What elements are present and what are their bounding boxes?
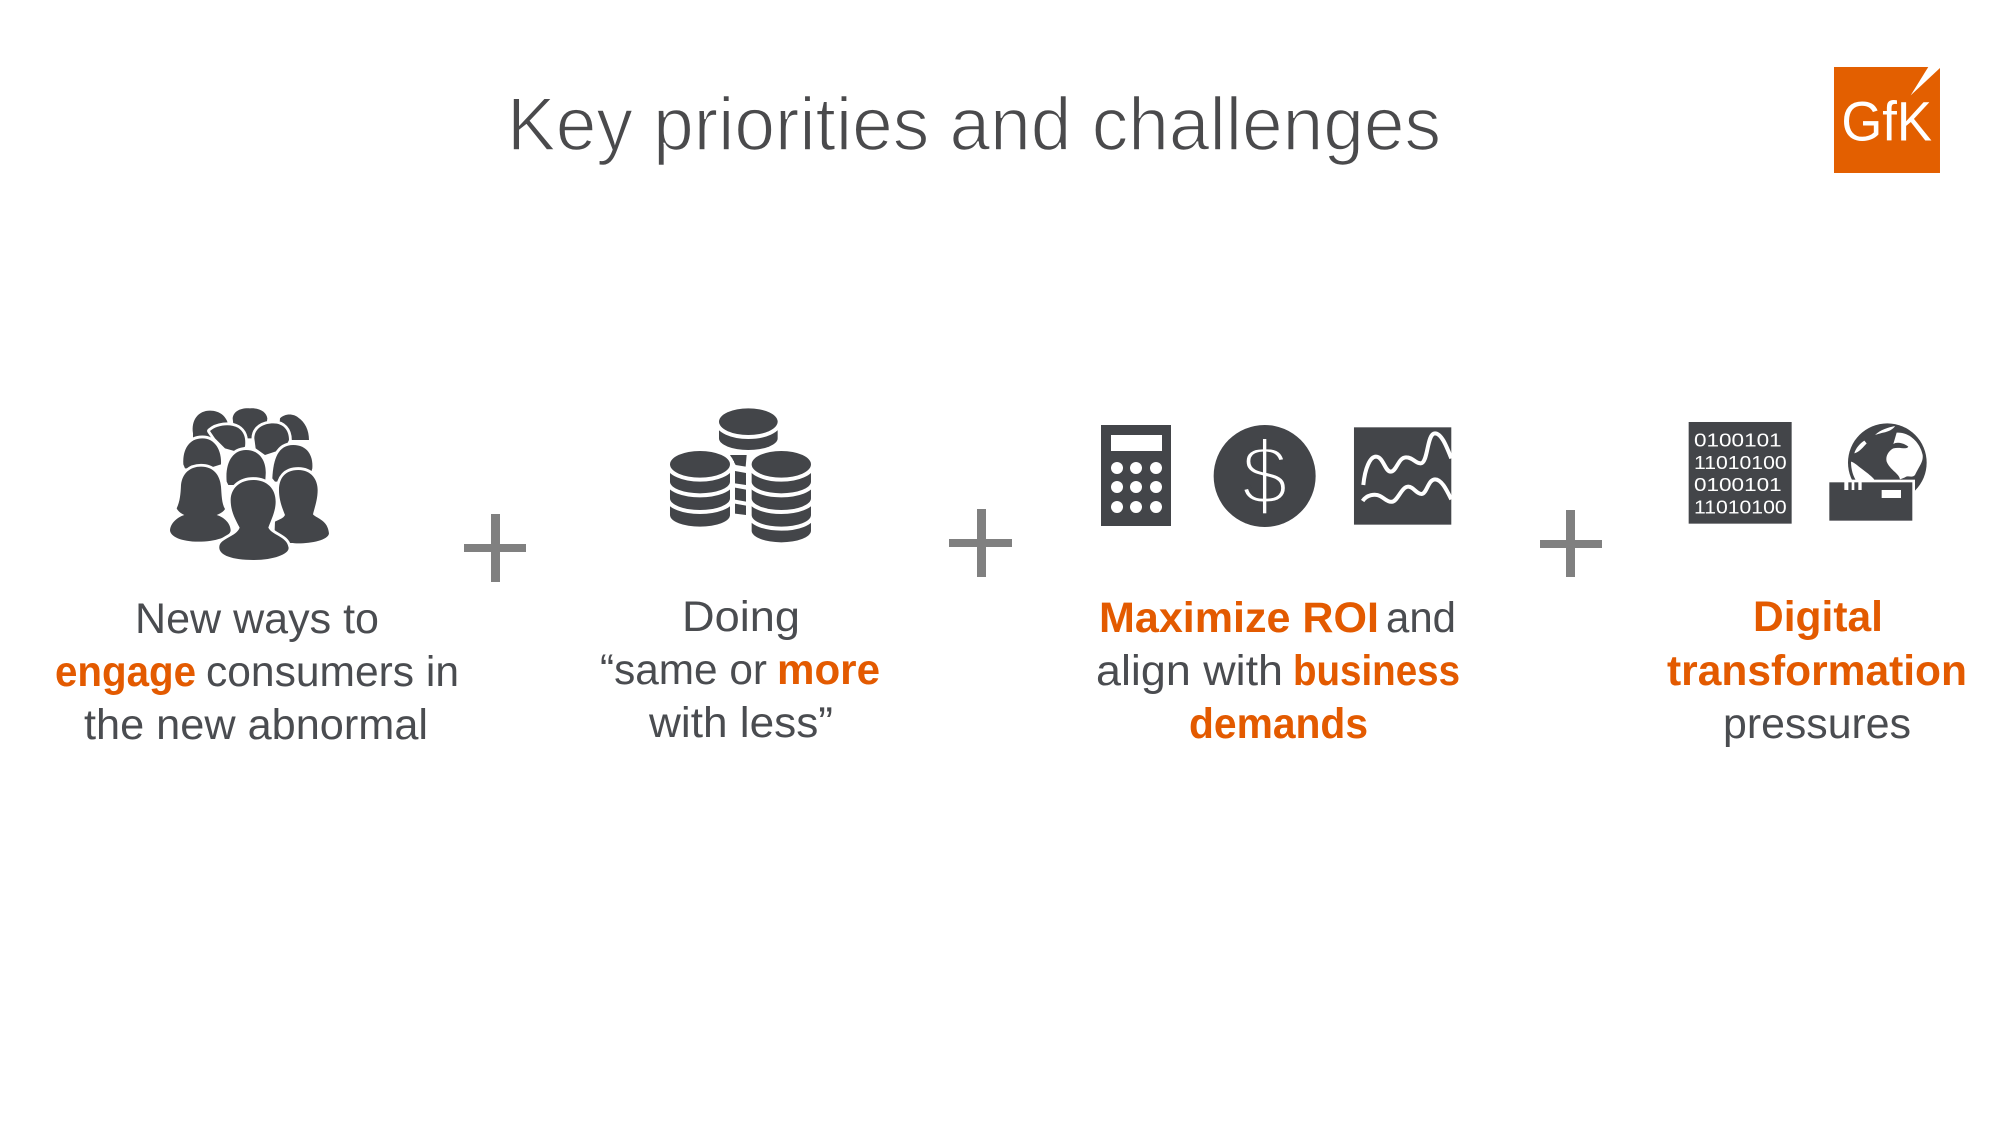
- column 1: consumers: [55, 408, 459, 749]
- icon: crowd of people: [170, 408, 329, 560]
- plus sign 2: [949, 509, 1012, 577]
- column 4: digital: [1667, 422, 1967, 748]
- text block: ROI: [1096, 595, 1460, 748]
- column 2: more with less: [600, 408, 880, 747]
- column 3: ROI: [1096, 425, 1460, 748]
- icon: GfK logo: [1834, 66, 1941, 173]
- text block: more with less: with less”: [648, 700, 833, 747]
- text block: ROI: align with: [1096, 648, 1283, 695]
- icon: line chart: [1354, 427, 1451, 525]
- text block: consumers: engage: [55, 649, 196, 696]
- plus sign 3: [1540, 510, 1602, 577]
- icon: binary panel: 0100101: [1694, 430, 1782, 451]
- text block: digital: transformation: [1667, 648, 1967, 695]
- plus sign 1: [464, 514, 526, 582]
- text block: more with less: “same or: [600, 647, 767, 694]
- icon: dollar coin: $: [1241, 429, 1288, 522]
- text block: more with less: [600, 594, 880, 747]
- text block: more with less: Doing: [682, 594, 800, 641]
- text block: consumers: the new abnormal: [84, 702, 428, 749]
- text block: consumers: consumers in: [206, 649, 459, 696]
- icon: binary panel: 11010100: [1694, 452, 1787, 473]
- text block: ROI: and: [1386, 595, 1456, 642]
- text block: digital: pressures: [1723, 701, 1911, 748]
- text block: digital: Digital: [1753, 594, 1883, 641]
- icon: dollar coin: [1214, 425, 1316, 527]
- icon: binary panel: 0100101: [1694, 474, 1782, 495]
- text block: consumers: New ways to: [135, 596, 379, 643]
- text block: digital: [1667, 594, 1967, 748]
- icon: coin stacks: [670, 408, 811, 542]
- text block: ROI: demands: [1189, 701, 1368, 748]
- text block: ROI: business: [1293, 648, 1460, 695]
- icon: GfK logo: GfK: [1841, 90, 1932, 153]
- text block: consumers: [55, 596, 459, 749]
- icon: calculator: [1101, 425, 1171, 526]
- text block: ROI: Maximize ROI: [1099, 595, 1379, 642]
- icon: binary panel: 11010100: [1694, 496, 1787, 517]
- title: Key priorities and challenges: [507, 82, 1441, 166]
- text block: more with less: more: [777, 647, 880, 694]
- icon: globe and box: [1827, 423, 1927, 523]
- icon: binary panel: [1689, 422, 1792, 524]
